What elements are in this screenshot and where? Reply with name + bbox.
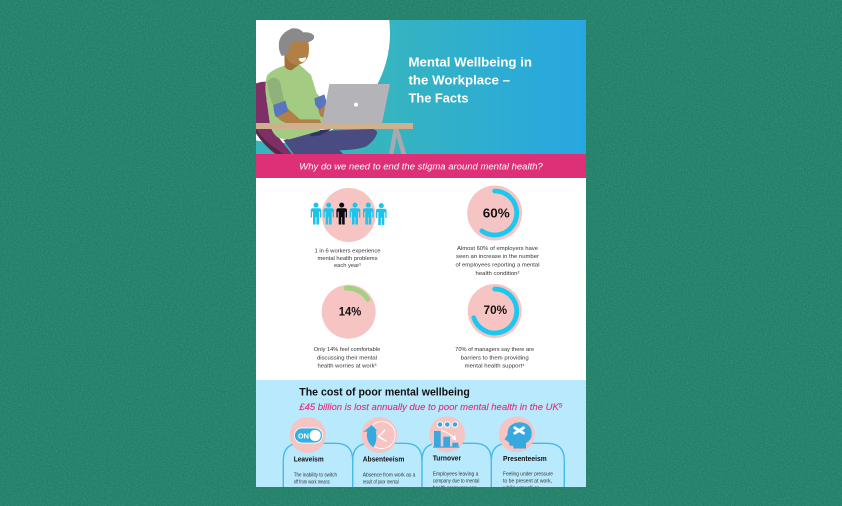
illustration: person at laptop	[256, 28, 413, 155]
subheading: £45 billion is lost annually due to poor mental health in the UK⁵	[298, 402, 563, 413]
stat: 60%: 60%	[483, 207, 510, 221]
card: turnover: health pressures can	[433, 485, 477, 491]
text: 60%: health condition²	[476, 271, 520, 277]
text: 1 in 6: 1 in 6 workers experience	[314, 248, 381, 254]
card: absenteeism: result of poor mental	[363, 480, 399, 486]
title	[408, 56, 532, 106]
panel: statistics	[256, 178, 586, 380]
card: presenteeism: Presenteeism	[503, 456, 547, 463]
stat: 14%	[314, 285, 380, 369]
icon: six people	[311, 203, 387, 225]
text: 14%: discussing their mental	[317, 355, 377, 361]
banner	[256, 154, 586, 178]
card: leaveism	[290, 417, 337, 486]
icon: on toggle: ON	[298, 431, 309, 440]
banner: Why do we need to end the stigma around mental health?	[299, 162, 544, 172]
stat: 1 in 6 workers	[311, 188, 387, 269]
title: The Facts	[408, 92, 469, 106]
card: turnover: Employees leaving a	[433, 471, 479, 477]
card: leaveism: Leaveism	[294, 456, 324, 463]
card: absenteeism: Absenteeism	[363, 456, 404, 463]
card outlines	[283, 443, 564, 490]
text: 60%: seen an increase in the number	[456, 254, 539, 260]
text: 14%: health worries at work³	[318, 363, 377, 369]
text: 14%	[314, 347, 380, 369]
text: 1 in 6: each year¹	[334, 263, 361, 269]
card: turnover	[429, 416, 479, 491]
stat: 70%	[455, 284, 534, 369]
text: 60%	[456, 246, 540, 277]
stat: 70%: 70%	[484, 305, 507, 317]
card: presenteeism: to be present at work,	[503, 478, 552, 484]
card: turnover: company due to mental	[433, 478, 479, 484]
card: leaveism: off from work means	[294, 480, 330, 486]
panel: cost of poor mental wellbeing	[256, 380, 586, 491]
header panel	[256, 20, 586, 154]
card: absenteeism: Absence from work as a	[363, 472, 415, 478]
text: 70%: barriers to them providing	[461, 355, 529, 361]
text: 60%: of employees reporting a mental	[456, 262, 540, 268]
text: 1 in 6	[314, 248, 381, 269]
text: 70%: mental health support⁴	[465, 363, 526, 369]
text: 60%: Almost 60% of employers have	[457, 246, 538, 252]
text: 14%: Only 14% feel comfortable	[314, 347, 380, 353]
card: leaveism: The inability to switch	[294, 472, 337, 478]
card: presenteeism: while unwell or	[503, 485, 539, 491]
card: presenteeism: Feeling under pressure	[503, 471, 553, 477]
text: 70%	[455, 347, 534, 369]
stat: 14%: 14%	[339, 306, 361, 318]
text: 70%: 70% of managers say there are	[455, 347, 534, 353]
card: absenteeism	[361, 417, 415, 486]
card: turnover: Turnover	[433, 455, 461, 462]
icon: clock with arrow	[363, 422, 395, 448]
title: Mental Wellbeing in	[408, 56, 532, 70]
heading: The cost of poor mental wellbeing	[299, 387, 470, 399]
card: presenteeism	[499, 416, 553, 491]
stat: 60%	[456, 186, 540, 277]
text: 1 in 6: mental health problems	[318, 256, 378, 262]
icon: coins and falling bars	[433, 422, 460, 448]
title: the Workplace –	[408, 74, 510, 88]
icon: head with puzzle cross	[504, 422, 532, 448]
